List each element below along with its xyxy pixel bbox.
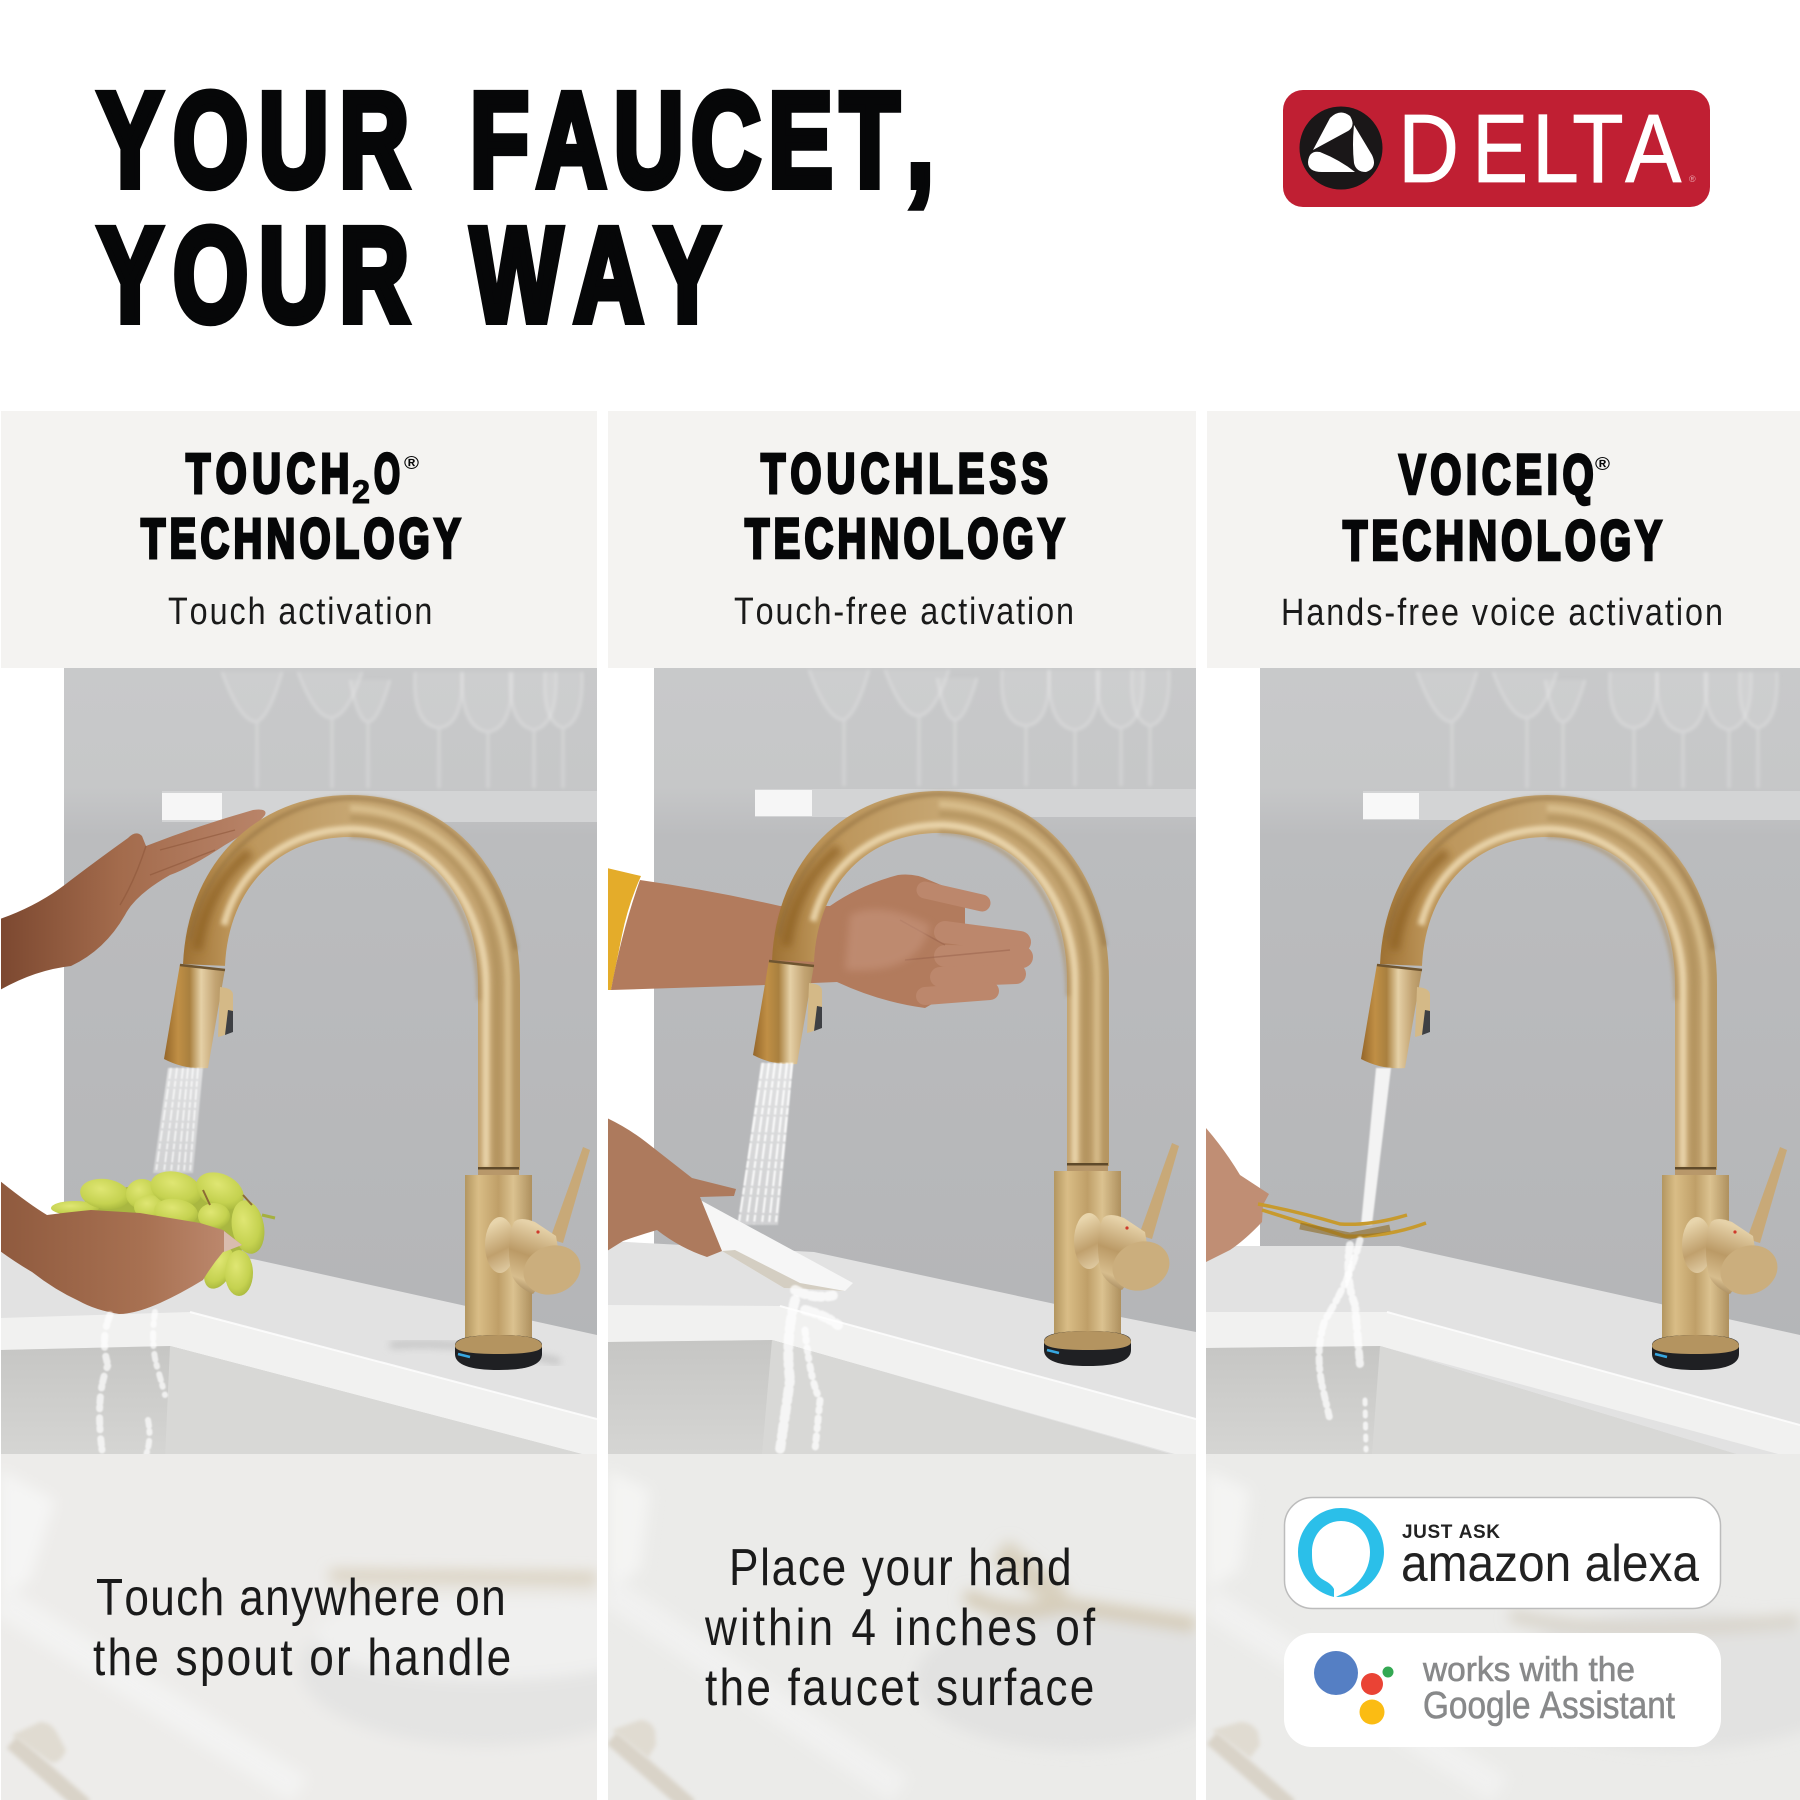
title: FAUCET,: [470, 64, 934, 215]
panel: voiceiq header: [1207, 411, 1800, 668]
subtitle: touch activation: Touch activation: [168, 591, 432, 633]
heading: touchless: [745, 443, 1064, 570]
water splash: [780, 1290, 838, 1450]
heading: touch2o: 2: [352, 474, 370, 510]
logo: Delta: DELTA: [1398, 96, 1682, 203]
faucet: [1361, 798, 1787, 1370]
plate: [702, 1200, 853, 1291]
panel: touch2o header: [1, 411, 597, 668]
badge: google assistant: Google Assistant: [1423, 1685, 1675, 1727]
faucet: [164, 798, 590, 1370]
title: YOUR: [98, 199, 409, 350]
arm: hand holding plate: [607, 1118, 736, 1257]
icon: alexa ring: [1298, 1508, 1384, 1597]
caption: touchless: within 4 inches of: [704, 1599, 1096, 1657]
panel: voice assistants: [1206, 1454, 1800, 1800]
logo: Delta: [1283, 90, 1710, 207]
heading: voiceiq: VOICEIQ: [1399, 444, 1594, 506]
caption: touch: the spout or handle: [93, 1629, 511, 1687]
caption: touch: Touch anywhere on: [96, 1569, 506, 1627]
heading: touch2o: O: [374, 442, 400, 504]
water drips: [100, 1312, 165, 1458]
icon: google dots: [1314, 1651, 1394, 1724]
faucet: [753, 794, 1179, 1366]
caption: touch: [93, 1569, 511, 1687]
water splash: [1319, 1240, 1366, 1450]
badge: amazon alexa: JUST ASK: [1402, 1522, 1500, 1543]
fork: [1258, 1204, 1426, 1236]
photo: touchless scene: [607, 668, 1196, 1460]
panel: touchless header: [608, 411, 1196, 668]
photo: touch scene: [0, 668, 597, 1460]
title: WAY: [471, 199, 719, 350]
arm: hand holding grapes: [0, 1181, 242, 1314]
badge: amazon alexa: amazon alexa: [1401, 1535, 1699, 1593]
subtitle: hands-free voice activation: Hands-free voice activation: [1281, 592, 1723, 634]
grapes: [51, 1165, 275, 1296]
title: [98, 64, 934, 350]
badge: amazon alexa: [1284, 1498, 1720, 1608]
panel: touchless caption: [608, 1454, 1235, 1800]
heading: touch2o: TECHNOLOGY: [141, 508, 460, 570]
heading: touchless: TOUCHLESS: [761, 443, 1048, 505]
photo: voice scene: [1206, 668, 1800, 1460]
heading: touch2o: TOUCH: [186, 443, 349, 505]
water spray: [153, 1068, 203, 1173]
logo: Delta: ®: [1689, 174, 1696, 184]
caption: touchless: the faucet surface: [705, 1659, 1094, 1717]
title: YOUR: [98, 64, 409, 215]
water stream: [1361, 1068, 1391, 1225]
heading: voiceiq: ®: [1595, 454, 1610, 474]
arm: hand holding fork: [1206, 1128, 1269, 1262]
panel: touch caption: [1, 1454, 597, 1800]
heading: voiceiq: TECHNOLOGY: [1343, 510, 1662, 572]
heading: touch2o: ®: [404, 453, 419, 473]
arm: hovering hand: [611, 875, 1022, 1008]
heading: touch2o: [141, 442, 460, 570]
badge: google assistant: works with the: [1422, 1651, 1635, 1689]
heading: touchless: TECHNOLOGY: [745, 508, 1064, 570]
arm: touching hand: [0, 810, 266, 990]
caption: touchless: [705, 1548, 1096, 1706]
water spray: [738, 1063, 793, 1225]
subtitle: touch-free activation: Touch-free activation: [734, 591, 1074, 633]
caption: touchless: Place your hand: [729, 1539, 1072, 1597]
sleeve: yellow: [607, 868, 641, 990]
badge: google assistant: [1284, 1633, 1721, 1747]
heading: voiceiq: [1343, 444, 1662, 572]
